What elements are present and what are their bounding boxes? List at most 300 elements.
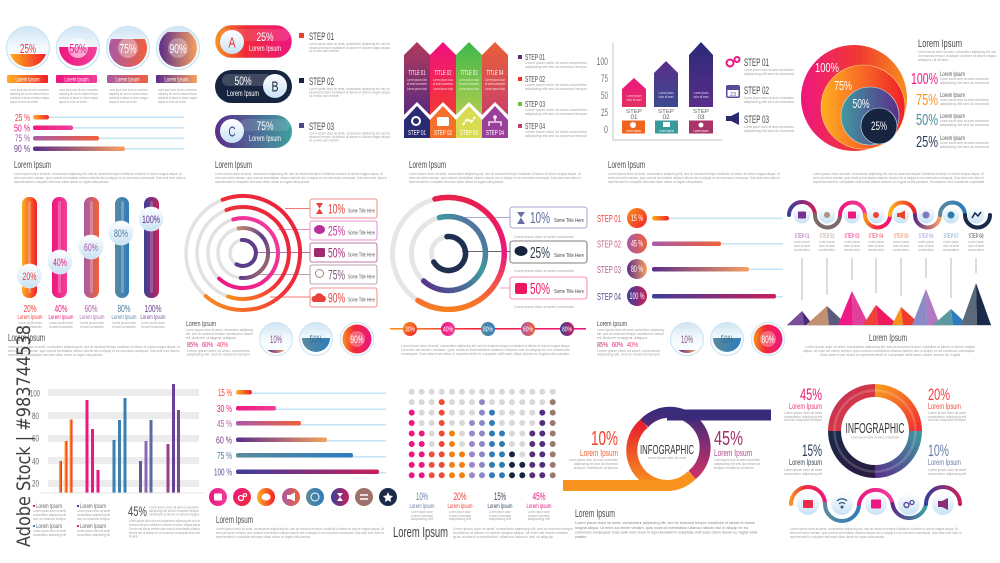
callout 10%: Lorem ipsum dolor sit amet	[928, 468, 966, 472]
arrow bar 03: STEP	[693, 109, 709, 115]
panel: percentage circles and bars	[6, 26, 200, 184]
panel paragraph: reprehenderit in voluptate velit esse cillum dolore eu fugiat nulla pariatur.	[216, 535, 311, 539]
arrow bar 02: STEP	[658, 109, 674, 115]
panel paragraph: incididunt ut labore et dolore magna aliqua. Ut enim ad minim veniam	[453, 531, 568, 535]
label box 75%	[310, 265, 377, 284]
bar 60%: Lorem Ipsum	[80, 314, 104, 321]
step 01 row: STEP 01	[597, 214, 621, 225]
step 03: eiusmod tempor incididunt ut labore et dolore magna aliqua	[309, 135, 390, 139]
callout 20%: consectetur adipiscing elit	[928, 415, 966, 419]
circle labels: Lorem Ipsum	[164, 77, 188, 83]
45% callout: Ut enim ad minim veniam quis nostrud exercitation ullamco	[129, 527, 200, 531]
arrow column 4: sit amet consectetur	[485, 82, 506, 86]
circle gauge 90%: 90%	[170, 41, 187, 56]
capsule B: Lorem Ipsum	[227, 89, 259, 98]
arrow bar 02	[654, 61, 678, 134]
step list: adipiscing elit sed do eiusmod tempor	[525, 112, 588, 116]
step 02	[299, 76, 390, 98]
bars group 2	[86, 400, 100, 493]
panel heading: Lorem Ipsum	[216, 515, 253, 526]
progress bars	[14, 113, 184, 155]
legend: consectetur adipiscing elit	[77, 533, 110, 537]
arrow bar 03: dolor sit amet	[694, 95, 709, 99]
bar 60%: Lorem ipsum dolor	[80, 321, 105, 325]
panel: quadrant donut infographic	[784, 384, 967, 539]
circle descriptions: Lorem ipsum dolor sit amet, consectetur	[10, 88, 50, 92]
chart axes	[613, 43, 722, 140]
step 02: adipiscing elit sed do eiusmod	[744, 100, 794, 104]
step 02: Lorem ipsum dolor sit amet, consectetur adipiscing elit, sed do	[309, 87, 390, 91]
y axis labels: 40	[32, 456, 39, 466]
panel paragraph: enim ad minim veniam, quis nostrud exercitation ullamco laboris nisi ut aliquip ex ea commodo consequat. Duis aute irure dolor in	[14, 176, 186, 180]
label box 75%: 75%	[328, 266, 345, 282]
bar 100%: 100%	[144, 304, 162, 315]
circle descriptions: adipiscing elit, sed do eiusmod tempor	[10, 92, 50, 96]
step 01 row	[597, 208, 783, 228]
panel: vertical thermometer bars	[8, 197, 180, 357]
label box 10%	[510, 207, 587, 228]
circle descriptions: incididunt ut labore et dolore magna	[59, 96, 98, 100]
grey ring tracks	[186, 196, 300, 310]
callout 20%: 20%	[928, 385, 950, 404]
stat 10%: Lorem ipsum dolor	[411, 510, 434, 514]
timeline: 40%	[443, 326, 453, 334]
panel intro: aliqua ut enim	[918, 58, 949, 62]
step labels: STEP 08	[968, 234, 984, 240]
progress bars: 75 %	[15, 134, 30, 144]
text block: 40%	[217, 342, 228, 349]
step 01: eiusmod tempor incididunt ut labore et dolore magna aliqua	[309, 46, 390, 50]
panel: wave timeline and triangles	[787, 202, 991, 357]
panel heading: Lorem Ipsum	[215, 160, 252, 171]
stat 20%: Lorem Ipsum	[448, 503, 472, 510]
icon row	[209, 488, 397, 506]
stat 10%: Lorem Ipsum	[410, 503, 434, 510]
stat 15%: adipiscing elit	[489, 517, 511, 521]
text block: adipiscing elit, sed do eiusmod tempor	[597, 352, 661, 356]
panel paragraph: enim ad minim veniam, quis nostrud exercitation ullamco laboris nisi ut aliquip ex ea commodo consequat. Duis aute irure dolor in	[790, 531, 962, 535]
panel paragraph: reprehenderit in voluptate velit esse cillum dolore eu fugiat nulla pariatur.	[790, 535, 885, 539]
circle descriptions: incididunt ut labore et dolore magna	[10, 96, 49, 100]
capsule A	[215, 25, 292, 58]
panel heading: Lorem Ipsum	[918, 38, 962, 50]
arrow column 1: Lorem ipsum dolor	[407, 87, 428, 91]
callout 45%: adipiscing elit sed do eiusmod	[714, 462, 760, 466]
legend 75%: 75%	[916, 92, 938, 109]
legend: sed do eiusmod tempor	[77, 517, 111, 521]
panel: three-ring radial chart	[390, 197, 587, 356]
step labels: STEP 01	[794, 234, 810, 240]
step notes: consectetur	[943, 248, 960, 252]
step notes: dolor sit amet	[918, 244, 934, 248]
step 01: Lorem ipsum dolor sit amet, consectetur adipiscing elit, sed do	[309, 42, 390, 46]
bar 100%: Lorem ipsum dolor	[141, 321, 166, 325]
legend 100%	[911, 71, 990, 88]
panel paragraph: Lorem ipsum dolor sit amet, consectetur adipiscing elit, sed do eiusmod tempor incididunt ut labore et dolore magna aliqua. Ut	[14, 172, 182, 176]
panel heading: Lorem Ipsum	[575, 508, 615, 520]
panel paragraph	[409, 172, 581, 184]
panel paragraph	[8, 345, 180, 357]
legend 25%	[916, 134, 990, 151]
panel paragraph: Lorem ipsum dolor sit amet, consectetur adipiscing elit, sed do eiusmod tempor incididunt ut labore et dolore magna aliqua.	[401, 344, 570, 348]
panel heading: Lorem Ipsum	[393, 524, 448, 541]
bars group 4	[139, 420, 152, 493]
label box 25%	[510, 241, 587, 263]
callout 15%: Lorem Ipsum	[789, 458, 822, 467]
legend 100%: 100%	[911, 71, 938, 88]
arrow bar 01	[622, 78, 646, 134]
bar 100%: Lorem Ipsum	[140, 314, 166, 321]
grey ring tracks	[392, 198, 504, 310]
panel paragraph: reprehenderit in voluptate velit esse cillum dolore eu fugiat nulla pariatur.	[14, 180, 109, 184]
panel paragraph: reprehenderit in voluptate velit esse cillum dolore eu fugiat nulla pariatur.	[8, 353, 103, 357]
step 01: Lorem ipsum dolor sit amet consectetur	[744, 68, 795, 72]
step notes: Lorem ipsum	[868, 240, 884, 244]
circle gauge 75%	[106, 26, 150, 70]
step 01	[299, 31, 390, 53]
axis labels: 0	[604, 124, 608, 136]
arrow column 2: Lorem ipsum dolor	[433, 78, 454, 82]
step 02: STEP 02	[309, 76, 334, 88]
callout 45%: Lorem ipsum dolor sit amet	[784, 411, 822, 415]
gauge 10%: 10%	[270, 334, 282, 346]
note 2: Lorem ipsum dolor sit amet consectetur	[514, 269, 575, 273]
legend 25%: adipiscing elit sed do eiusmod	[940, 145, 989, 149]
timeline: 80%	[483, 326, 493, 334]
text block: 85%	[187, 342, 198, 349]
bar rows: 15 %	[218, 388, 232, 399]
step notes: dolor sit amet	[893, 244, 909, 248]
arrow bar 02: Lorem ipsum	[658, 91, 674, 95]
step notes: Lorem ipsum	[819, 240, 835, 244]
label box 75%: Some Title Here	[348, 274, 375, 280]
legend 25%: Lorem ipsum dolor sit amet consectetur	[940, 141, 990, 145]
text block	[597, 319, 664, 356]
stat 45%: Lorem ipsum dolor	[528, 510, 551, 514]
panel: nested circles	[801, 38, 996, 184]
bar 80%: sit amet consectetur	[112, 325, 137, 329]
arrow column 3	[456, 42, 482, 138]
nested circle chart: 25%	[871, 119, 887, 133]
ribbon ring	[563, 412, 771, 486]
y axis labels: 20	[32, 478, 39, 488]
step 01: STEP 01	[744, 57, 769, 69]
45% callout: irure	[129, 534, 138, 538]
callout 45%: Lorem Ipsum	[789, 402, 822, 411]
callout 15%: 15%	[802, 441, 822, 460]
circle descriptions: aliqua ut enim ad minim	[59, 100, 87, 104]
capsule A: Lorem Ipsum	[249, 44, 281, 53]
gauge 50%: 50%	[310, 334, 323, 346]
callout 45%: consectetur adipiscing elit	[784, 415, 822, 419]
arrow column 3: STEP 03	[460, 128, 478, 137]
arrow column 3: TITLE 03	[460, 70, 478, 77]
panel paragraph: Lorem ipsum dolor sit amet, consectetur adipiscing elit, sed do eiusmod tempor incididunt ut labore et dolore magna aliqua. Ut	[8, 345, 180, 349]
circle descriptions: adipiscing elit, sed do eiusmod tempor	[109, 92, 149, 96]
stat 10%: 10%	[416, 491, 428, 503]
legend 50%: Lorem ipsum dolor sit amet consectetur	[940, 119, 990, 123]
callout 20%: Lorem ipsum dolor sit amet	[928, 411, 966, 415]
coloured arcs	[418, 197, 504, 309]
wave ribbon	[791, 487, 960, 521]
wave icons	[797, 493, 954, 515]
step notes: dolor sit amet	[794, 244, 810, 248]
arrow column 4: STEP 04	[486, 128, 504, 137]
panel paragraph	[401, 344, 570, 356]
coloured dots	[412, 402, 553, 476]
stat 20%: 20%	[454, 491, 467, 503]
step list: adipiscing elit sed do eiusmod tempor	[525, 87, 588, 91]
capsule C: C	[228, 124, 236, 140]
callout 15%	[784, 441, 822, 476]
label box 10%: Some Title Here	[554, 218, 584, 224]
step 03: Lorem ipsum dolor sit amet consectetur	[744, 125, 795, 129]
timeline: 60%	[523, 326, 533, 334]
step labels: STEP 07	[944, 234, 959, 240]
callout 45%	[784, 385, 823, 422]
gauge 10%	[670, 322, 704, 356]
ring centre title: INFOGRAPHIC	[640, 442, 694, 457]
watermark: Adobe Stock side label: Adobe Stock | #983744538	[13, 325, 35, 547]
circle descriptions: aliqua ut enim ad minim	[109, 100, 137, 104]
panel paragraph: Lorem ipsum dolor sit amet, consectetur adipiscing elit, sed do eiusmod tempor	[453, 527, 574, 531]
arrow column 3: sit amet consectetur	[459, 82, 480, 86]
arrow column 4	[482, 42, 508, 138]
label box 10%: 10%	[328, 200, 345, 216]
step notes: consectetur	[844, 248, 861, 252]
stat 45%: Lorem Ipsum	[526, 503, 552, 510]
text block: Lorem ipsum dolor sit amet, consectetur	[187, 349, 251, 353]
arrow column 2	[430, 42, 456, 138]
step labels	[794, 234, 984, 240]
bar 60%: 60%	[84, 242, 98, 254]
panel paragraph: aliqua. Ut enim ad minim veniam, quis nostrud exercitation ullamco laboris nisi ut aliquip ex ea commodo consequat.	[803, 349, 975, 353]
callout 45%: sed do eiusmod tempor	[784, 418, 823, 422]
text block: 40%	[627, 342, 638, 349]
step list: Lorem ipsum dolor sit amet consectetur	[525, 83, 588, 87]
circle descriptions: aliqua ut enim ad minim	[158, 100, 186, 104]
45% callout: laboris nisi ut aliquip ex ea commodo consequat duis aute	[129, 531, 200, 535]
step list: Lorem ipsum dolor sit amet consectetur	[525, 108, 588, 112]
step 03	[744, 114, 795, 133]
arrow bar 02: 02	[662, 115, 670, 121]
legend 50%: adipiscing elit sed do eiusmod	[940, 123, 989, 127]
bar rows: 45 %	[217, 419, 232, 430]
progress bars: 25 %	[15, 113, 30, 124]
arrow column 2: Lorem ipsum dolor	[433, 87, 454, 91]
donut title	[846, 420, 905, 440]
gauge 90%	[340, 322, 374, 356]
label box 90%: Some Title Here	[348, 298, 375, 304]
gauge 80%	[752, 322, 784, 356]
step list: Lorem ipsum dolor sit amet consectetur	[525, 130, 588, 134]
step labels: STEP 05	[894, 234, 909, 240]
icon: megaphone	[726, 112, 739, 125]
legend: Lorem Ipsum	[80, 504, 106, 510]
label box 10%	[310, 199, 377, 218]
legend 100%: Lorem ipsum dolor sit amet consectetur	[940, 77, 990, 81]
step notes: consectetur	[968, 248, 985, 252]
circle gauge 50%	[56, 26, 100, 70]
label box 25%: 25%	[328, 222, 345, 238]
bar 60%	[79, 197, 105, 329]
legend	[33, 504, 111, 537]
panel paragraph	[790, 527, 962, 539]
callout 10%: adipiscing elit sed do eiusmod	[574, 462, 618, 466]
circle descriptions: adipiscing elit, sed do eiusmod tempor	[158, 92, 198, 96]
panel paragraph: Lorem ipsum dolor sit amet, consectetur adipiscing elit, sed do eiusmod tempor incididunt ut labore et dolore magna aliqua. Ut	[215, 172, 383, 176]
circle gauge 75%: 75%	[120, 41, 137, 56]
arrow column 3: Lorem ipsum dolor	[459, 87, 480, 91]
step notes: Lorem ipsum	[968, 240, 984, 244]
panel: step progress bars	[597, 208, 784, 356]
step 03 row	[597, 259, 783, 279]
bar 100%: 100%	[142, 214, 160, 226]
donut title: Lorem ipsum dolor sit amet, consectetur	[851, 436, 900, 440]
stat 45%	[526, 491, 552, 521]
panel: five-ring radial chart	[186, 196, 377, 356]
step 02 row	[597, 234, 783, 254]
circle gauge 90%	[156, 26, 200, 70]
panel paragraph: Lorem ipsum dolor sit amet, consectetur adipiscing elit, sed do eiusmod tempor incididunt ut labore et dolore	[575, 521, 755, 525]
text block: elit, sed do eiusmod tempor incididunt ut labore	[186, 332, 253, 336]
stat 15%: 15%	[494, 491, 506, 503]
timeline: 80%	[562, 326, 572, 334]
gauge 10%	[260, 322, 292, 356]
step 02 row: 45 %	[631, 238, 643, 248]
nested circle chart: 50%	[852, 96, 870, 111]
step notes: Lorem ipsum	[918, 240, 934, 244]
gauge 10%: 10%	[681, 334, 693, 346]
legend 25%: Lorem Ipsum	[940, 136, 965, 142]
panel intro: do eiusmod tempor incididunt ut labore et dolore magna	[918, 54, 996, 58]
bar 20%	[18, 197, 43, 329]
stat 10%	[410, 491, 434, 521]
timeline	[390, 322, 586, 336]
wave icons	[794, 206, 984, 224]
arrow column 1	[404, 42, 430, 138]
legend: Lorem ipsum dolor sit amet	[77, 529, 110, 533]
label box 90%	[310, 288, 377, 307]
step 03: ut enim ad minim	[309, 138, 339, 142]
45% callout: 45%	[128, 503, 147, 519]
45% callout: incididunt ut labore et dolore magna	[149, 512, 199, 516]
stat 45%: sit amet consectetur	[528, 514, 551, 518]
panel paragraph	[14, 172, 186, 184]
panel paragraph	[215, 172, 387, 184]
circle descriptions	[10, 88, 198, 104]
arrow column 1: TITLE 01	[408, 70, 426, 77]
panel heading: Lorem Ipsum	[8, 333, 45, 344]
capsule B: B	[272, 78, 278, 96]
bar 40%: 40%	[54, 304, 68, 315]
step 03 row: STEP 03	[597, 265, 621, 276]
legend: sed do eiusmod tempor	[33, 517, 67, 521]
connector lines	[256, 208, 310, 297]
panel paragraph: Ut enim ad minim veniam, quis nostrud exercitation ullamco laboris nisi ut aliquip ex ea commodo	[401, 348, 570, 352]
bar 80%: 80%	[118, 304, 131, 315]
label box 50%: 50%	[530, 281, 550, 298]
panel paragraph: reprehenderit in voluptate velit esse cillum dolore eu fugiat nulla pariatur. Excepteur sint occaecat cupidatat	[813, 180, 984, 184]
panel paragraph	[453, 527, 574, 539]
callout 10%: Lorem ipsum dolor sit amet consectetur	[569, 458, 619, 462]
panel paragraph	[575, 521, 757, 539]
callout 20%: Lorem Ipsum	[928, 402, 961, 411]
axis labels: 50	[601, 90, 608, 102]
callout 15%: Lorem ipsum dolor sit amet	[784, 468, 822, 472]
panel paragraph: magna aliqua. Ut enim ad minim veniam, quis nostrud exercitation ullamco laboris nisi ut aliquip ex ea	[575, 526, 748, 530]
step 01: adipiscing elit sed do eiusmod	[744, 72, 794, 76]
text block: 60%	[612, 342, 623, 349]
callout 10%	[928, 441, 966, 476]
legend: Lorem ipsum dolor sit amet	[77, 509, 110, 513]
ring centre title	[640, 442, 694, 460]
panel: column chart	[30, 384, 205, 538]
axis labels	[596, 56, 608, 136]
panel paragraph: enim ad minim veniam, quis nostrud exercitation ullamco laboris nisi ut aliquip ex ea commodo consequat. Duis aute irure dolor in	[8, 349, 180, 353]
arrow column 4: Lorem ipsum dolor	[485, 78, 506, 82]
legend: consectetur adipiscing elit	[33, 533, 66, 537]
stat 45%: 45%	[532, 491, 546, 503]
panel paragraph: Lorem ipsum dolor sit amet, consectetur adipiscing elit, sed do eiusmod tempor incididunt ut labore et dolore magna aliqua. Ut	[409, 172, 581, 176]
legend: consectetur adipiscing elit	[77, 513, 110, 517]
callout 20%: sed do eiusmod tempor	[928, 418, 967, 422]
capsule C: 75%	[256, 119, 274, 133]
stat 10%: sit amet consectetur	[411, 514, 434, 518]
note 1: Lorem ipsum dolor sit amet consectetur	[514, 235, 575, 239]
arrow bar 02: Lorem Ipsum	[659, 129, 674, 133]
callout 10%: tempor incididunt ut labore	[574, 466, 618, 470]
nested circle chart	[801, 45, 907, 151]
capsule C: Lorem Ipsum	[249, 134, 281, 143]
step 02: Lorem ipsum dolor sit amet consectetur	[744, 96, 795, 100]
bar 20%: Lorem ipsum dolor	[18, 321, 43, 325]
stat 20%: Lorem ipsum dolor	[449, 510, 472, 514]
step 04 row	[597, 286, 783, 306]
arrow column 4: TITLE 04	[486, 70, 504, 77]
coloured arcs	[206, 196, 300, 310]
legend 75%: adipiscing elit sed do eiusmod	[940, 102, 989, 106]
panel paragraph: enim ad minim veniam, quis nostrud exercitation ullamco laboris nisi ut aliquip ex ea commodo consequat. Duis aute irure dolor in	[608, 176, 780, 180]
step notes: Lorem ipsum	[844, 240, 860, 244]
callout 10%	[569, 428, 619, 470]
bars group 1	[59, 420, 72, 493]
step 02: eiusmod tempor incididunt ut labore et dolore magna aliqua	[309, 90, 390, 94]
gauge 90%: 90%	[350, 334, 364, 346]
panel paragraph: Lorem ipsum dolor sit amet, consectetur adipiscing elit, sed do eiusmod tempor incididunt ut labore et dolore magna aliqua. Ut	[813, 172, 984, 176]
label box 10%: Some Title Here	[348, 208, 375, 214]
panel paragraph: commodo consequat. Duis aute irure dolor in reprehenderit in voluptate velit esse cillum dolore eu fugiat nulla	[575, 530, 757, 534]
bar 40%: sit amet consectetur	[49, 325, 74, 329]
step 01: STEP 01	[309, 31, 334, 43]
text block: Lorem ipsum dolor sit amet, consectetur	[597, 349, 661, 353]
callout 45%: 45%	[800, 385, 822, 404]
step notes: consectetur	[893, 248, 910, 252]
step notes: consectetur	[819, 248, 836, 252]
connector lines	[442, 218, 510, 288]
bar rows: 75 %	[217, 451, 232, 462]
step list: STEP 04	[525, 122, 545, 131]
panel intro: Lorem ipsum dolor sit amet, consectetur adipiscing elit, sed	[918, 50, 996, 54]
bars group 3	[112, 398, 126, 493]
panel paragraph: Duis aute irure dolor in reprehenderit in voluptate velit esse cillum dolore eu fugiat	[820, 353, 960, 357]
circle descriptions: aliqua ut enim ad minim	[10, 100, 38, 104]
callout 15%: consectetur adipiscing elit	[784, 472, 822, 476]
step labels: STEP 04	[868, 234, 884, 240]
step 03 row: 80 %	[631, 264, 643, 274]
text block: et dolore magna aliqua	[597, 336, 647, 340]
stat 15%	[488, 491, 512, 521]
